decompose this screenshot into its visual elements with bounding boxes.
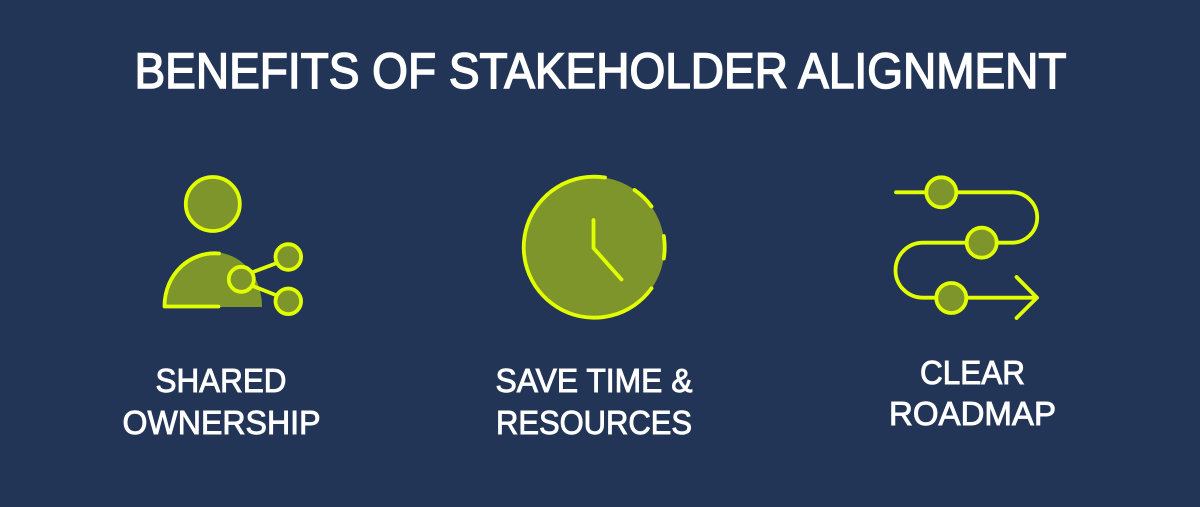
label: shared ownership bbox=[122, 362, 320, 441]
label: clear roadmap bbox=[889, 354, 1056, 432]
network nodes bbox=[229, 244, 301, 314]
clock face bbox=[522, 177, 664, 319]
person body bbox=[163, 252, 262, 307]
icon: shared ownership person with network bbox=[163, 177, 301, 314]
icon: roadmap bbox=[896, 177, 1037, 318]
label: shared ownership: OWNERSHIP bbox=[122, 404, 320, 441]
route with arrow bbox=[896, 192, 1037, 318]
network links bbox=[253, 263, 277, 296]
clock hands bbox=[594, 220, 622, 280]
icon: clock bbox=[522, 177, 665, 319]
label: clear roadmap: CLEAR bbox=[920, 354, 1025, 391]
label: save time and resources: SAVE TIME & bbox=[496, 362, 692, 399]
label: clear roadmap: ROADMAP bbox=[889, 395, 1056, 432]
label: save time and resources: RESOURCES bbox=[496, 404, 692, 441]
label: save time and resources bbox=[496, 362, 692, 441]
title: BENEFITS OF STAKEHOLDER ALIGNMENT bbox=[134, 43, 1066, 99]
clock rim bbox=[524, 177, 665, 318]
label: shared ownership: SHARED bbox=[156, 362, 286, 399]
person head bbox=[186, 177, 240, 231]
route stops bbox=[926, 177, 997, 313]
